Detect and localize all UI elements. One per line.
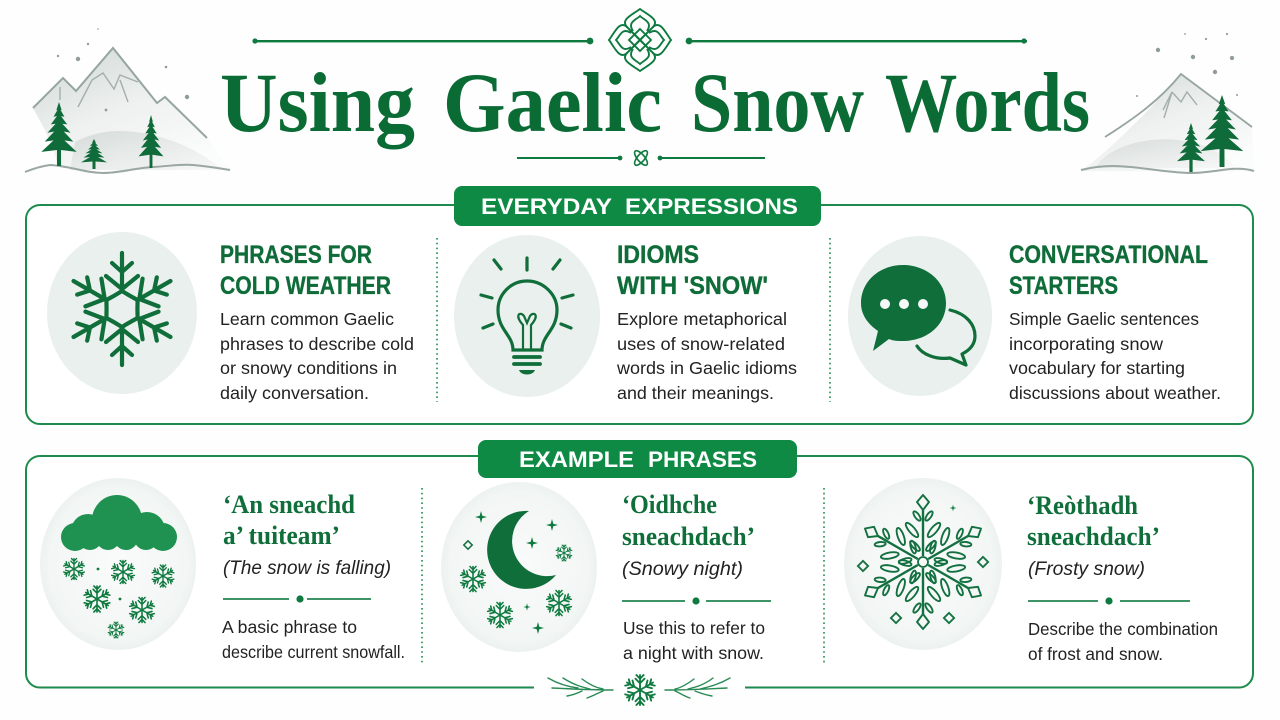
heading xyxy=(617,241,768,300)
body text: Simple Gaelic sentences xyxy=(1009,309,1199,329)
heading: IDIOMS xyxy=(617,241,699,269)
phrase xyxy=(622,489,755,551)
icon: snow cloud xyxy=(40,478,196,650)
card: idioms with snow xyxy=(454,235,797,403)
heading: STARTERS xyxy=(1009,272,1118,300)
body text xyxy=(222,617,405,662)
header xyxy=(25,9,1254,173)
body text xyxy=(623,618,765,663)
heading xyxy=(1009,241,1208,300)
ornament rule xyxy=(1028,597,1190,605)
body text: discussions about weather. xyxy=(1009,383,1221,403)
card: reothadh sneachdach xyxy=(844,478,1218,664)
top rule left xyxy=(252,38,593,44)
section pill: example phrases xyxy=(478,440,797,478)
icon: celtic knot xyxy=(609,9,671,71)
title: Snow xyxy=(691,56,864,150)
body text xyxy=(1009,309,1221,403)
body text: vocabulary for starting xyxy=(1009,358,1185,378)
section pill: everyday expressions xyxy=(454,186,821,226)
body text: a night with snow. xyxy=(623,643,764,663)
section pill: everyday expressions: EVERYDAY xyxy=(481,194,612,219)
phrase: ‘Oidhche xyxy=(622,489,717,519)
illustration: left snowy mountains with pines xyxy=(25,28,230,173)
translation: (The snow is falling) xyxy=(223,557,391,579)
body text: or snowy conditions in xyxy=(220,358,397,378)
card: conversational starters xyxy=(848,236,1221,403)
heading: CONVERSATIONAL xyxy=(1009,241,1208,269)
panel: everyday expressions xyxy=(26,186,1253,424)
body text xyxy=(616,309,797,403)
heading: PHRASES FOR xyxy=(220,241,372,269)
title: Using xyxy=(220,56,415,150)
translation: (Frosty snow) xyxy=(1028,558,1145,580)
phrase: ‘Reòthadh xyxy=(1027,490,1138,520)
body text: and their meanings. xyxy=(617,383,774,403)
body text: Learn common Gaelic xyxy=(220,309,394,329)
body text: daily conversation. xyxy=(220,383,369,403)
body text: describe current snowfall. xyxy=(222,642,405,662)
section pill: everyday expressions: EXPRESSIONS xyxy=(625,194,798,219)
top rule right xyxy=(686,38,1027,44)
lower title ornament xyxy=(517,149,765,167)
icon: speech bubbles xyxy=(848,236,992,396)
card: an sneachd a' tuiteam xyxy=(40,478,405,662)
body text: Explore metaphorical xyxy=(617,309,787,329)
ornament rule xyxy=(223,595,371,603)
heading: COLD WEATHER xyxy=(220,272,391,300)
icon: frost snowflake xyxy=(844,478,1002,650)
section pill: example phrases: PHRASES xyxy=(648,447,757,472)
body text: A basic phrase to xyxy=(222,617,357,637)
title: Gaelic xyxy=(443,56,662,150)
title xyxy=(220,56,1090,150)
body text: words in Gaelic idioms xyxy=(616,358,797,378)
body text: of frost and snow. xyxy=(1028,644,1163,664)
icon: snowflake xyxy=(47,232,197,394)
icon: light bulb xyxy=(454,235,600,397)
footer ornament: snowflake and sprigs xyxy=(548,675,730,705)
phrase: a’ tuiteam’ xyxy=(223,520,340,550)
heading xyxy=(220,241,391,300)
body text: incorporating snow xyxy=(1009,334,1163,354)
panel: example phrases xyxy=(26,440,1253,705)
card: phrases for cold weather xyxy=(47,232,414,403)
panel border xyxy=(26,456,1253,688)
icon: crescent moon and stars xyxy=(441,482,597,652)
section pill: example phrases: EXAMPLE xyxy=(519,447,634,472)
body text: phrases to describe cold xyxy=(220,334,414,354)
card: oidhche sneachdach xyxy=(441,482,771,663)
body text xyxy=(1028,619,1218,664)
body text: uses of snow-related xyxy=(617,334,785,354)
illustration: right snowy mountain with pines xyxy=(1081,33,1254,173)
ornament rule xyxy=(622,597,771,605)
phrase: ‘An sneachd xyxy=(223,489,355,519)
body text xyxy=(220,309,414,403)
panel border xyxy=(26,205,1253,424)
body text: Describe the combination xyxy=(1028,619,1218,639)
heading: WITH 'SNOW' xyxy=(617,272,768,300)
phrase xyxy=(223,489,355,550)
body text: Use this to refer to xyxy=(623,618,765,638)
phrase xyxy=(1027,490,1160,551)
phrase: sneachdach’ xyxy=(1027,521,1160,551)
translation: (Snowy night) xyxy=(622,558,743,580)
phrase: sneachdach’ xyxy=(622,521,755,551)
title: Words xyxy=(885,56,1090,150)
